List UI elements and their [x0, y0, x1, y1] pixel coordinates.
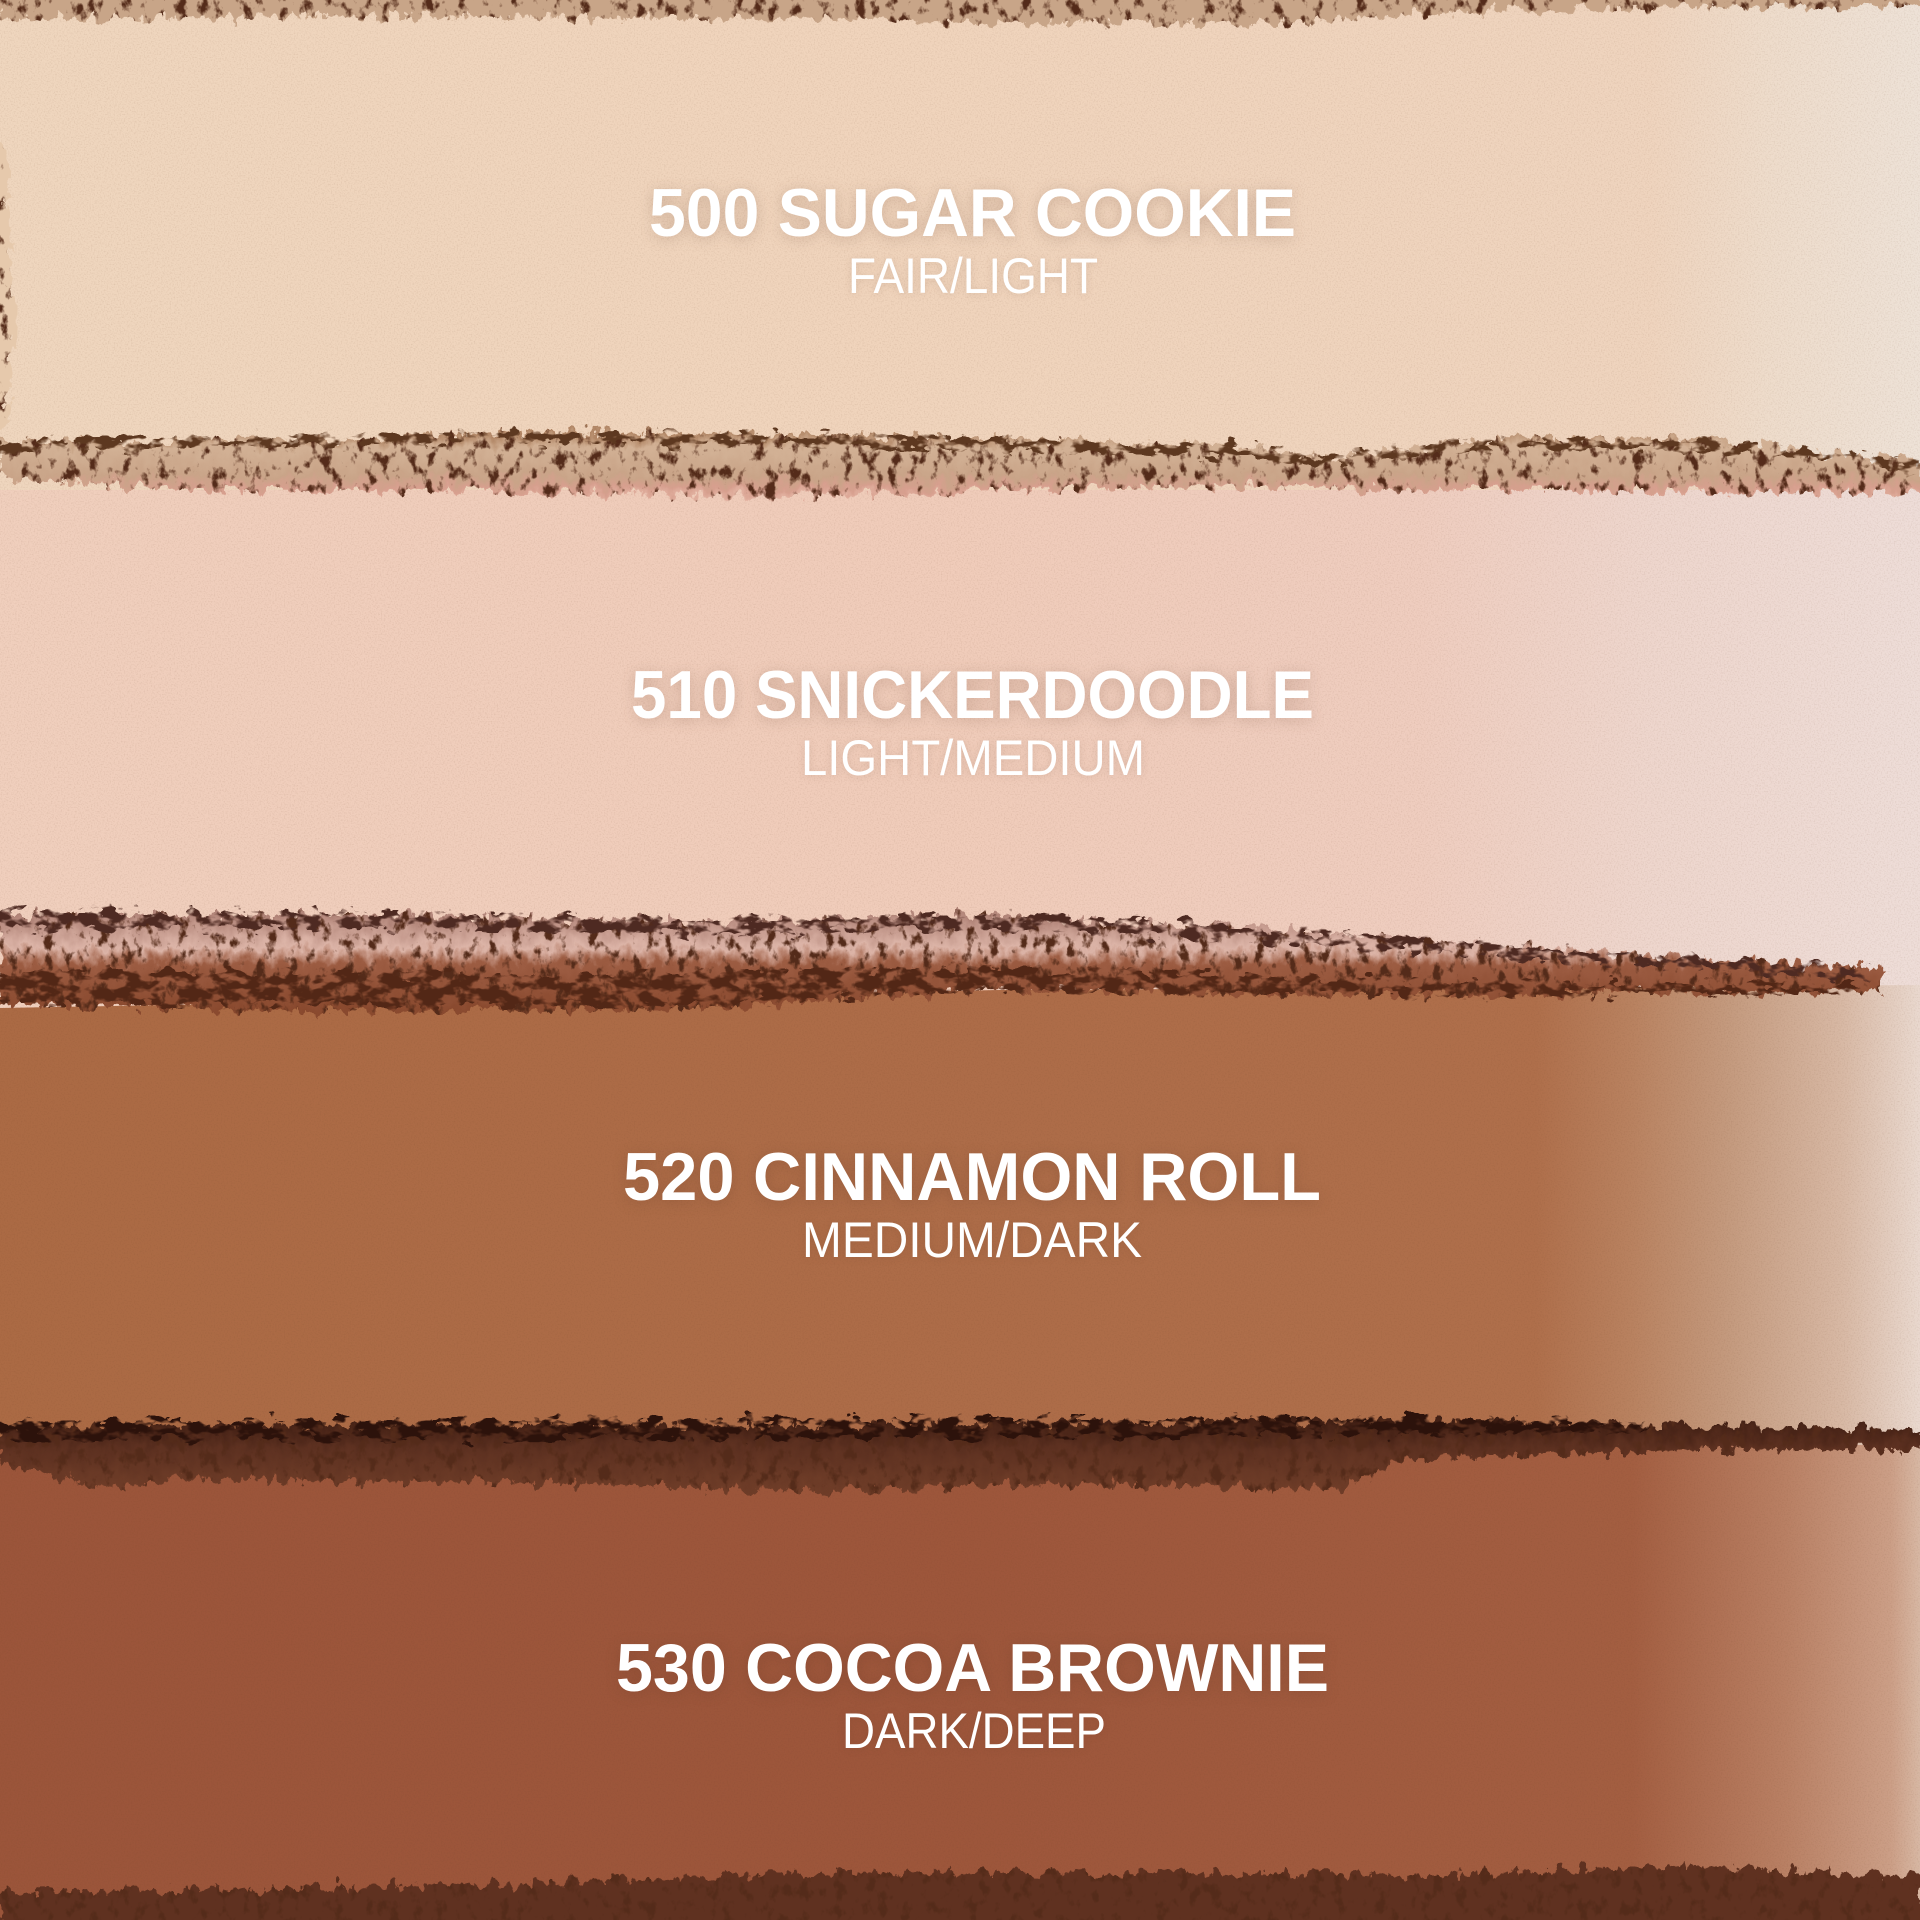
label: 500 sugar cookie	[649, 175, 1296, 304]
shade name: 510 SNICKERDOODLE	[631, 657, 1314, 733]
crumble: between 520 and 530	[0, 1418, 1920, 1490]
shade name: 500 SUGAR COOKIE	[649, 175, 1296, 251]
label: 520 cinnamon roll	[623, 1139, 1321, 1268]
shade name: 520 CINNAMON ROLL	[623, 1139, 1321, 1215]
crumble: left edge of first swatch	[0, 130, 16, 430]
dark ridge	[0, 912, 1870, 980]
crumble: between 510 and 520	[0, 912, 1885, 1012]
swatch band: 500 sugar cookie	[0, 0, 1920, 500]
dark lower clumps	[0, 968, 1860, 1006]
crumble: top edge	[0, 0, 1920, 24]
label: 510 snickerdoodle	[631, 657, 1314, 786]
label: 530 cocoa brownie	[616, 1630, 1329, 1759]
swatch band: 520 cinnamon roll	[0, 985, 1920, 1450]
crumble: bottom edge	[0, 1866, 1920, 1920]
skin tone: MEDIUM/DARK	[802, 1212, 1142, 1268]
skin tone: FAIR/LIGHT	[848, 248, 1098, 304]
crumble: between 500 and 510	[0, 432, 1920, 498]
skin tone: DARK/DEEP	[842, 1703, 1106, 1759]
dark ridge	[0, 432, 1920, 470]
dark ridge	[0, 1418, 1650, 1440]
shade name: 530 COCOA BROWNIE	[616, 1630, 1329, 1706]
swatch band: 510 snickerdoodle	[0, 490, 1920, 1010]
skin tone: LIGHT/MEDIUM	[801, 730, 1145, 786]
swatch band: 530 cocoa brownie	[0, 1445, 1920, 1920]
